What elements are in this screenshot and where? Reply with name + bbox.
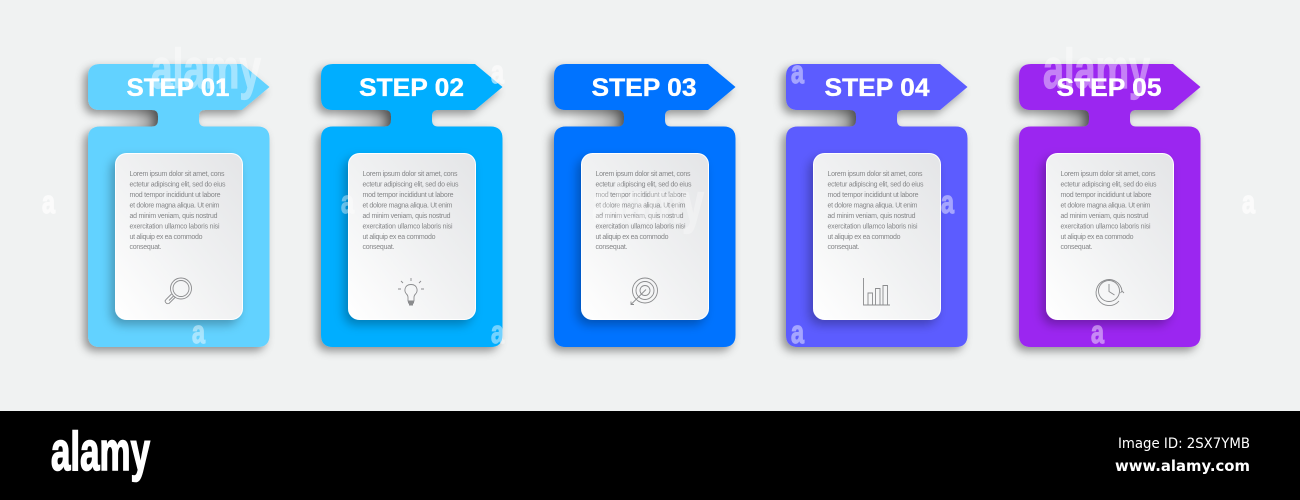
text card: ectetur adipiscing elit, sed do eius — [828, 182, 924, 188]
text card: Lorem ipsum dolor sit amet, cons — [130, 171, 225, 178]
text card: ectetur adipiscing elit, sed do eius — [362, 182, 459, 188]
panel: step 03 — [554, 64, 736, 347]
panel: step 02 — [321, 64, 502, 347]
heading: STEP 04 — [824, 74, 930, 102]
text card: ad minim veniam, quis nostrud — [828, 213, 916, 220]
text card — [814, 154, 940, 320]
panel: step 05 — [1019, 64, 1200, 347]
text card: ad minim veniam, quis nostrud — [362, 213, 451, 220]
text card: mod tempor incididunt ut labore — [362, 192, 454, 199]
text card: et dolore magna aliqua. Ut enim — [362, 202, 453, 210]
panel: step 01 — [88, 64, 270, 347]
watermarks — [42, 37, 1255, 350]
text card: ut aliquip ex ea commodo — [362, 234, 436, 241]
text card: ad minim veniam, quis nostrud — [130, 213, 218, 220]
footer bar — [0, 411, 1300, 500]
text card: Lorem ipsum dolor sit amet, cons — [596, 171, 691, 178]
watermarks: a — [1091, 314, 1104, 350]
text card: et dolore magna aliqua. Ut enim — [1060, 202, 1151, 210]
text card: mod tempor incididunt ut labore — [596, 192, 687, 199]
text card: consequat. — [596, 244, 628, 251]
heading: STEP 01 — [126, 74, 230, 102]
watermarks: a — [941, 184, 954, 220]
text card: Lorem ipsum dolor sit amet, cons — [362, 171, 458, 178]
watermarks: a — [791, 314, 804, 350]
text card: ectetur adipiscing elit, sed do eius — [130, 182, 226, 188]
heading: STEP 03 — [592, 74, 696, 102]
text card — [348, 154, 476, 320]
text card: ut aliquip ex ea commodo — [1060, 234, 1134, 241]
text card: mod tempor incididunt ut labore — [130, 192, 221, 199]
text card: ut aliquip ex ea commodo — [130, 234, 203, 241]
text card: exercitation ullamco laboris nisi — [130, 224, 220, 230]
text card: consequat. — [130, 244, 162, 251]
text card: ectetur adipiscing elit, sed do eius — [1060, 182, 1157, 188]
text card: Lorem ipsum dolor sit amet, cons — [1060, 171, 1156, 178]
text card: exercitation ullamco laboris nisi — [362, 224, 453, 230]
text card: mod tempor incididunt ut labore — [1060, 192, 1152, 199]
watermarks: a — [42, 184, 55, 220]
text card: consequat. — [1060, 244, 1093, 251]
text card: et dolore magna aliqua. Ut enim — [596, 202, 686, 210]
heading: STEP 05 — [1056, 74, 1162, 102]
watermarks: a — [341, 184, 354, 220]
watermarks: a — [491, 54, 504, 90]
text card: et dolore magna aliqua. Ut enim — [130, 202, 220, 210]
text card: exercitation ullamco laboris nisi — [1060, 224, 1151, 230]
icon: magnifier — [165, 278, 192, 304]
text card: exercitation ullamco laboris nisi — [828, 224, 918, 230]
icon: clock — [1096, 280, 1124, 306]
text card: ad minim veniam, quis nostrud — [1060, 213, 1149, 220]
text card: ut aliquip ex ea commodo — [828, 234, 901, 241]
icon: target — [631, 278, 658, 304]
text card — [1046, 154, 1174, 320]
watermarks: alamy — [1043, 37, 1150, 100]
text card: ad minim veniam, quis nostrud — [596, 213, 684, 220]
text card: consequat. — [362, 244, 395, 251]
watermarks: alamy — [592, 171, 704, 234]
icon: bar chart — [864, 278, 890, 305]
watermarks: alamy — [151, 37, 261, 100]
panel shape — [88, 64, 270, 347]
watermarks: a — [491, 314, 504, 350]
icon: light bulb — [398, 278, 424, 304]
watermarks: a — [1242, 184, 1255, 220]
text card: ectetur adipiscing elit, sed do eius — [596, 182, 692, 188]
image id: Image ID: 2SX7YMB — [1118, 436, 1250, 452]
text card: mod tempor incididunt ut labore — [828, 192, 919, 199]
website: www.alamy.com — [1115, 457, 1250, 475]
text card: exercitation ullamco laboris nisi — [596, 224, 686, 230]
text card: et dolore magna aliqua. Ut enim — [828, 202, 918, 210]
alamy logo: alamy — [51, 420, 150, 482]
text card — [116, 154, 242, 320]
panel: step 04 — [786, 64, 968, 347]
panel shape — [786, 64, 968, 347]
text card — [582, 154, 708, 320]
panel shape — [554, 64, 736, 347]
panel shape — [1019, 64, 1200, 347]
watermarks: a — [192, 314, 205, 350]
panel shape — [321, 64, 502, 347]
heading: STEP 02 — [359, 74, 464, 102]
text card: Lorem ipsum dolor sit amet, cons — [828, 171, 923, 178]
text card: consequat. — [828, 244, 860, 251]
watermarks: a — [791, 54, 804, 90]
text card: ut aliquip ex ea commodo — [596, 234, 669, 241]
